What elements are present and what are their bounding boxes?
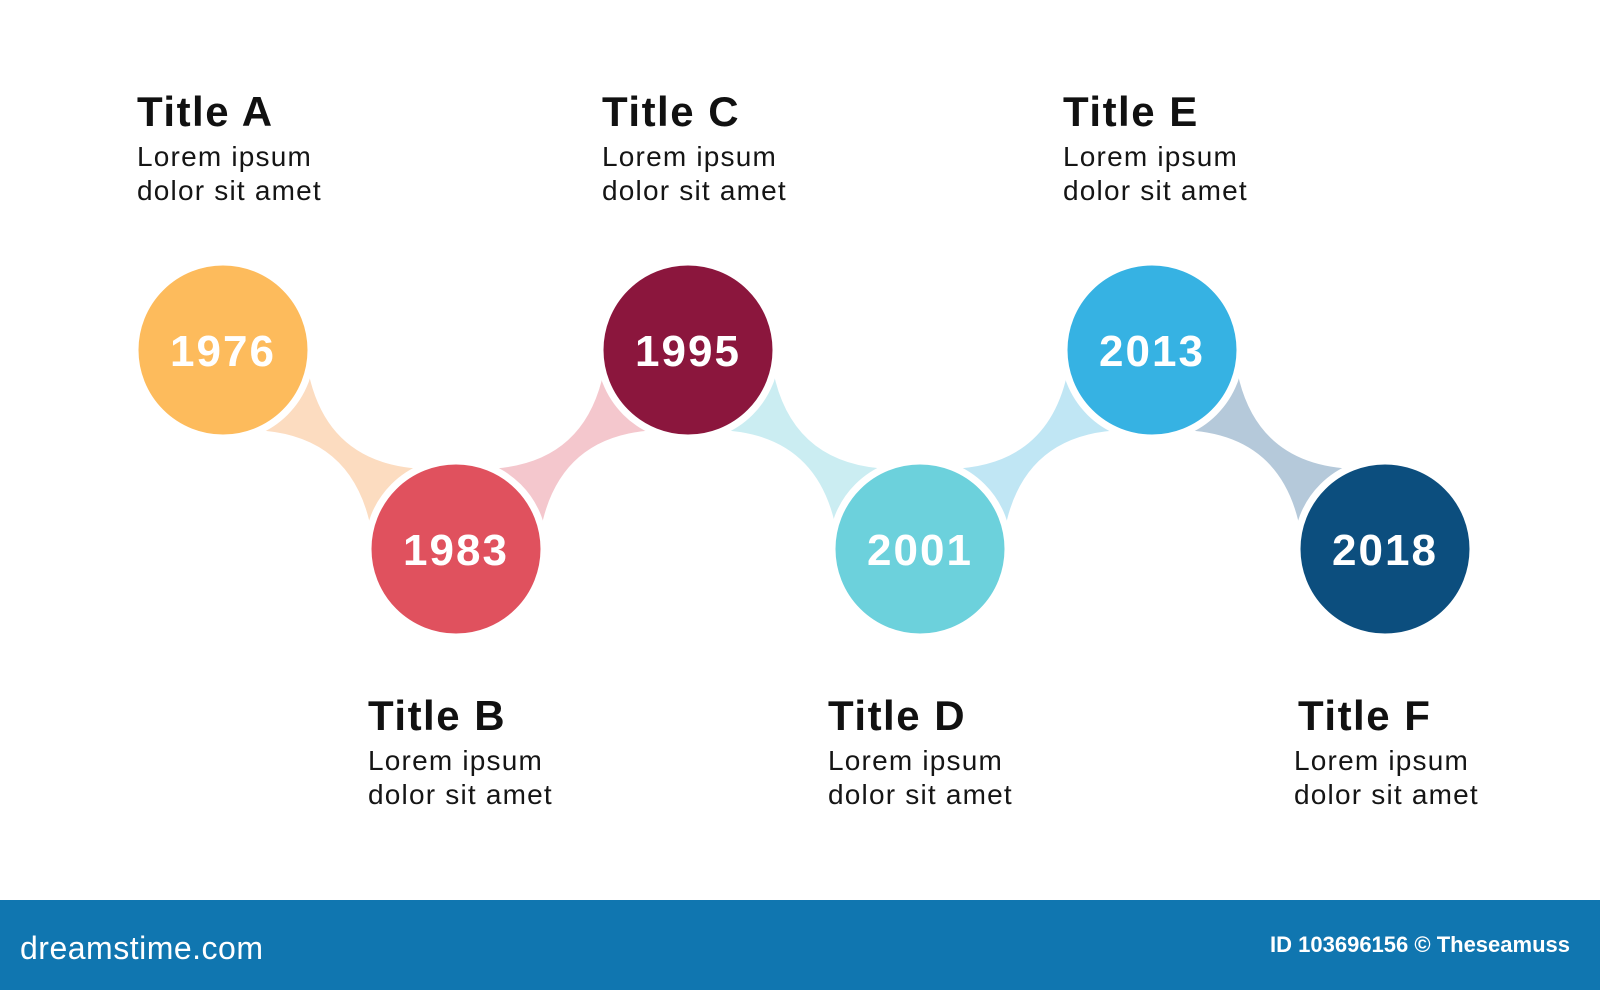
circle 1995 xyxy=(600,262,776,438)
circle 1976: 1976 xyxy=(170,327,276,376)
text: Title E: Title E xyxy=(1063,88,1199,135)
text: Title C: Title C xyxy=(602,88,740,135)
circle 1983 xyxy=(368,461,544,637)
connector A-B xyxy=(251,365,428,534)
footer bar xyxy=(0,900,1600,990)
text: Title A: Title A xyxy=(137,88,274,135)
connector D-E xyxy=(948,365,1125,534)
text: Title C: dolor sit amet xyxy=(602,175,787,206)
text: Title C: Lorem ipsum xyxy=(602,141,777,172)
circle 1976 xyxy=(135,262,311,438)
text: Title A: Lorem ipsum xyxy=(137,141,312,172)
text: Title D: Lorem ipsum xyxy=(828,745,1003,776)
circle 2018: 2018 xyxy=(1332,526,1438,575)
footer credit: ID 103696156 © Theseamuss xyxy=(1270,932,1570,957)
text: Title F: Title F xyxy=(1298,692,1431,739)
connector B-C xyxy=(484,365,661,534)
text: Title F xyxy=(1294,692,1479,810)
text: Title B: dolor sit amet xyxy=(368,779,553,810)
text: Title F: dolor sit amet xyxy=(1294,779,1479,810)
text: Title A: dolor sit amet xyxy=(137,175,322,206)
footer logo: dreamstime.com xyxy=(20,930,264,966)
text: Title E: dolor sit amet xyxy=(1063,175,1248,206)
text: Title C xyxy=(602,88,787,206)
circle 2001 xyxy=(832,461,1008,637)
text: Title B: Lorem ipsum xyxy=(368,745,543,776)
text: Title F: Lorem ipsum xyxy=(1294,745,1469,776)
connector C-D xyxy=(716,365,893,534)
text: Title B xyxy=(368,692,553,810)
circle 1995: 1995 xyxy=(635,327,741,376)
text: Title E xyxy=(1063,88,1248,206)
text: Title D: Title D xyxy=(828,692,966,739)
circle 2001: 2001 xyxy=(867,526,973,575)
text: Title E: Lorem ipsum xyxy=(1063,141,1238,172)
circle 2013: 2013 xyxy=(1099,327,1205,376)
circle 2018 xyxy=(1297,461,1473,637)
circle 2013 xyxy=(1064,262,1240,438)
circle 1983: 1983 xyxy=(403,526,509,575)
text: Title D: dolor sit amet xyxy=(828,779,1013,810)
connector E-F xyxy=(1180,365,1357,534)
text: Title B: Title B xyxy=(368,692,506,739)
text: Title D xyxy=(828,692,1013,810)
text: Title A xyxy=(137,88,322,206)
